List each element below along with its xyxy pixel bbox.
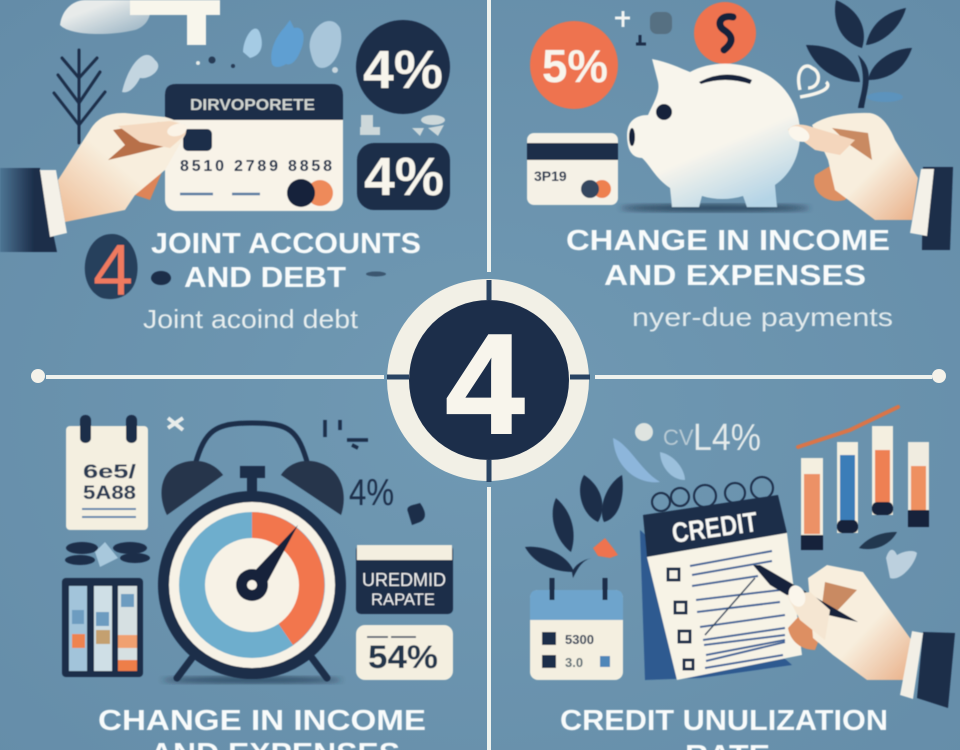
- floating percent text: [635, 417, 761, 459]
- small calendar: 5300: [565, 632, 594, 647]
- percent badge: circle: 4%: [363, 40, 443, 100]
- tail: [799, 66, 828, 97]
- nostril: [629, 128, 635, 146]
- heading: AND EXPENSES: [604, 260, 866, 292]
- checklist notebook: [640, 477, 802, 680]
- bells: [162, 461, 223, 515]
- dot and smudge: [151, 271, 386, 285]
- needle: [248, 525, 298, 592]
- percent badge: 5%: [530, 21, 618, 109]
- heading: CHANGE IN INCOME: [566, 225, 890, 257]
- sleeve: [917, 632, 955, 708]
- label: 54%: [356, 625, 453, 680]
- big number: 4: [446, 305, 525, 464]
- heading: [151, 228, 421, 294]
- panel: change in income and expenses (piggy bank): [527, 0, 953, 332]
- pen: [753, 565, 858, 622]
- heading: [566, 225, 890, 292]
- writing hand with pen: [705, 565, 955, 708]
- subtitle: nyer-due payments: [632, 302, 893, 332]
- sleeve: [0, 168, 57, 252]
- flower: [593, 538, 618, 558]
- plant: [806, 0, 912, 108]
- label: rate: [356, 545, 453, 614]
- small credit card: [527, 133, 618, 205]
- hand squeezing piggy bank: [786, 113, 953, 250]
- number badge: 4: [93, 231, 133, 311]
- calendar note: 5A88: [83, 483, 136, 504]
- central number badge: [387, 279, 590, 482]
- sleeve: [922, 167, 953, 250]
- navy disc: [409, 300, 569, 460]
- heading: AND DEBT: [184, 262, 346, 294]
- bar chart: [798, 407, 929, 550]
- floating percent text: L4%: [693, 417, 761, 459]
- heading: JOINT ACCOUNTS: [151, 228, 421, 260]
- thumb: [787, 592, 830, 640]
- eye: [656, 104, 672, 120]
- hub: [236, 569, 268, 601]
- hand holding card: [0, 113, 188, 252]
- card logo: [287, 179, 333, 207]
- card chip: [183, 129, 212, 151]
- cloud and cross decoration: [60, 0, 220, 45]
- small decorations: [360, 115, 445, 136]
- label: 54%: 54%: [368, 639, 438, 675]
- card lines: [180, 193, 260, 195]
- calendar note: 6e5/: [83, 462, 137, 483]
- icon: bare tree: [54, 50, 105, 143]
- small credit card: 3P19: [534, 168, 567, 184]
- cream ring: [387, 279, 589, 481]
- calendar note: [66, 415, 148, 530]
- rings: [652, 477, 773, 511]
- heading: [98, 705, 426, 750]
- plant: [525, 475, 623, 578]
- panel: change in income and expenses (alarm clock): [62, 415, 453, 750]
- heading: CHANGE IN INCOME: [98, 705, 426, 737]
- blue splashes: [122, 20, 341, 92]
- handle: [195, 423, 308, 465]
- credit card: [165, 84, 343, 211]
- small decorations: [168, 418, 425, 525]
- alarm clock: [158, 423, 346, 684]
- small leaves: [859, 532, 917, 579]
- floating percent text: CV: [663, 425, 694, 450]
- cuff: [40, 170, 67, 237]
- legs: [177, 658, 327, 678]
- label: rate: RAPATE: [371, 590, 435, 609]
- percent badge: circle: [356, 20, 450, 114]
- heading: CREDIT UNULIZATION: [560, 705, 888, 737]
- cuff: [910, 169, 934, 236]
- dial: [158, 491, 346, 679]
- check boxes: [668, 569, 693, 669]
- blue leaves: [613, 438, 685, 482]
- card number: 8510 2789 8858: [180, 158, 332, 175]
- leaves: [65, 542, 150, 567]
- panel: credit utilization rate: [525, 407, 955, 750]
- card brand text: DIRVOPORETE: [190, 97, 315, 114]
- list lines: [690, 551, 785, 668]
- small calendar: 3.0: [565, 655, 583, 670]
- coin slot: [699, 74, 752, 84]
- panel: joint accounts and debt: [0, 0, 450, 334]
- coin: [694, 2, 756, 64]
- label: rate: UREDMID: [362, 570, 446, 590]
- top knob: [240, 466, 265, 505]
- percent label: 4%: [349, 472, 394, 513]
- small icons: [615, 11, 672, 44]
- percent badge: rounded box: 4%: [364, 147, 444, 207]
- percent badge: 5%: 5%: [542, 40, 608, 92]
- cuff: [900, 631, 923, 699]
- subtitle: Joint acoind debt: [143, 304, 359, 334]
- heading: [560, 705, 888, 750]
- axis end dots: [31, 369, 946, 383]
- notebook title: CREDIT: [670, 506, 759, 549]
- trend line: [798, 407, 898, 447]
- piggy bank: [620, 59, 828, 212]
- small calendar: [530, 578, 623, 680]
- tablet of charts: [62, 578, 143, 677]
